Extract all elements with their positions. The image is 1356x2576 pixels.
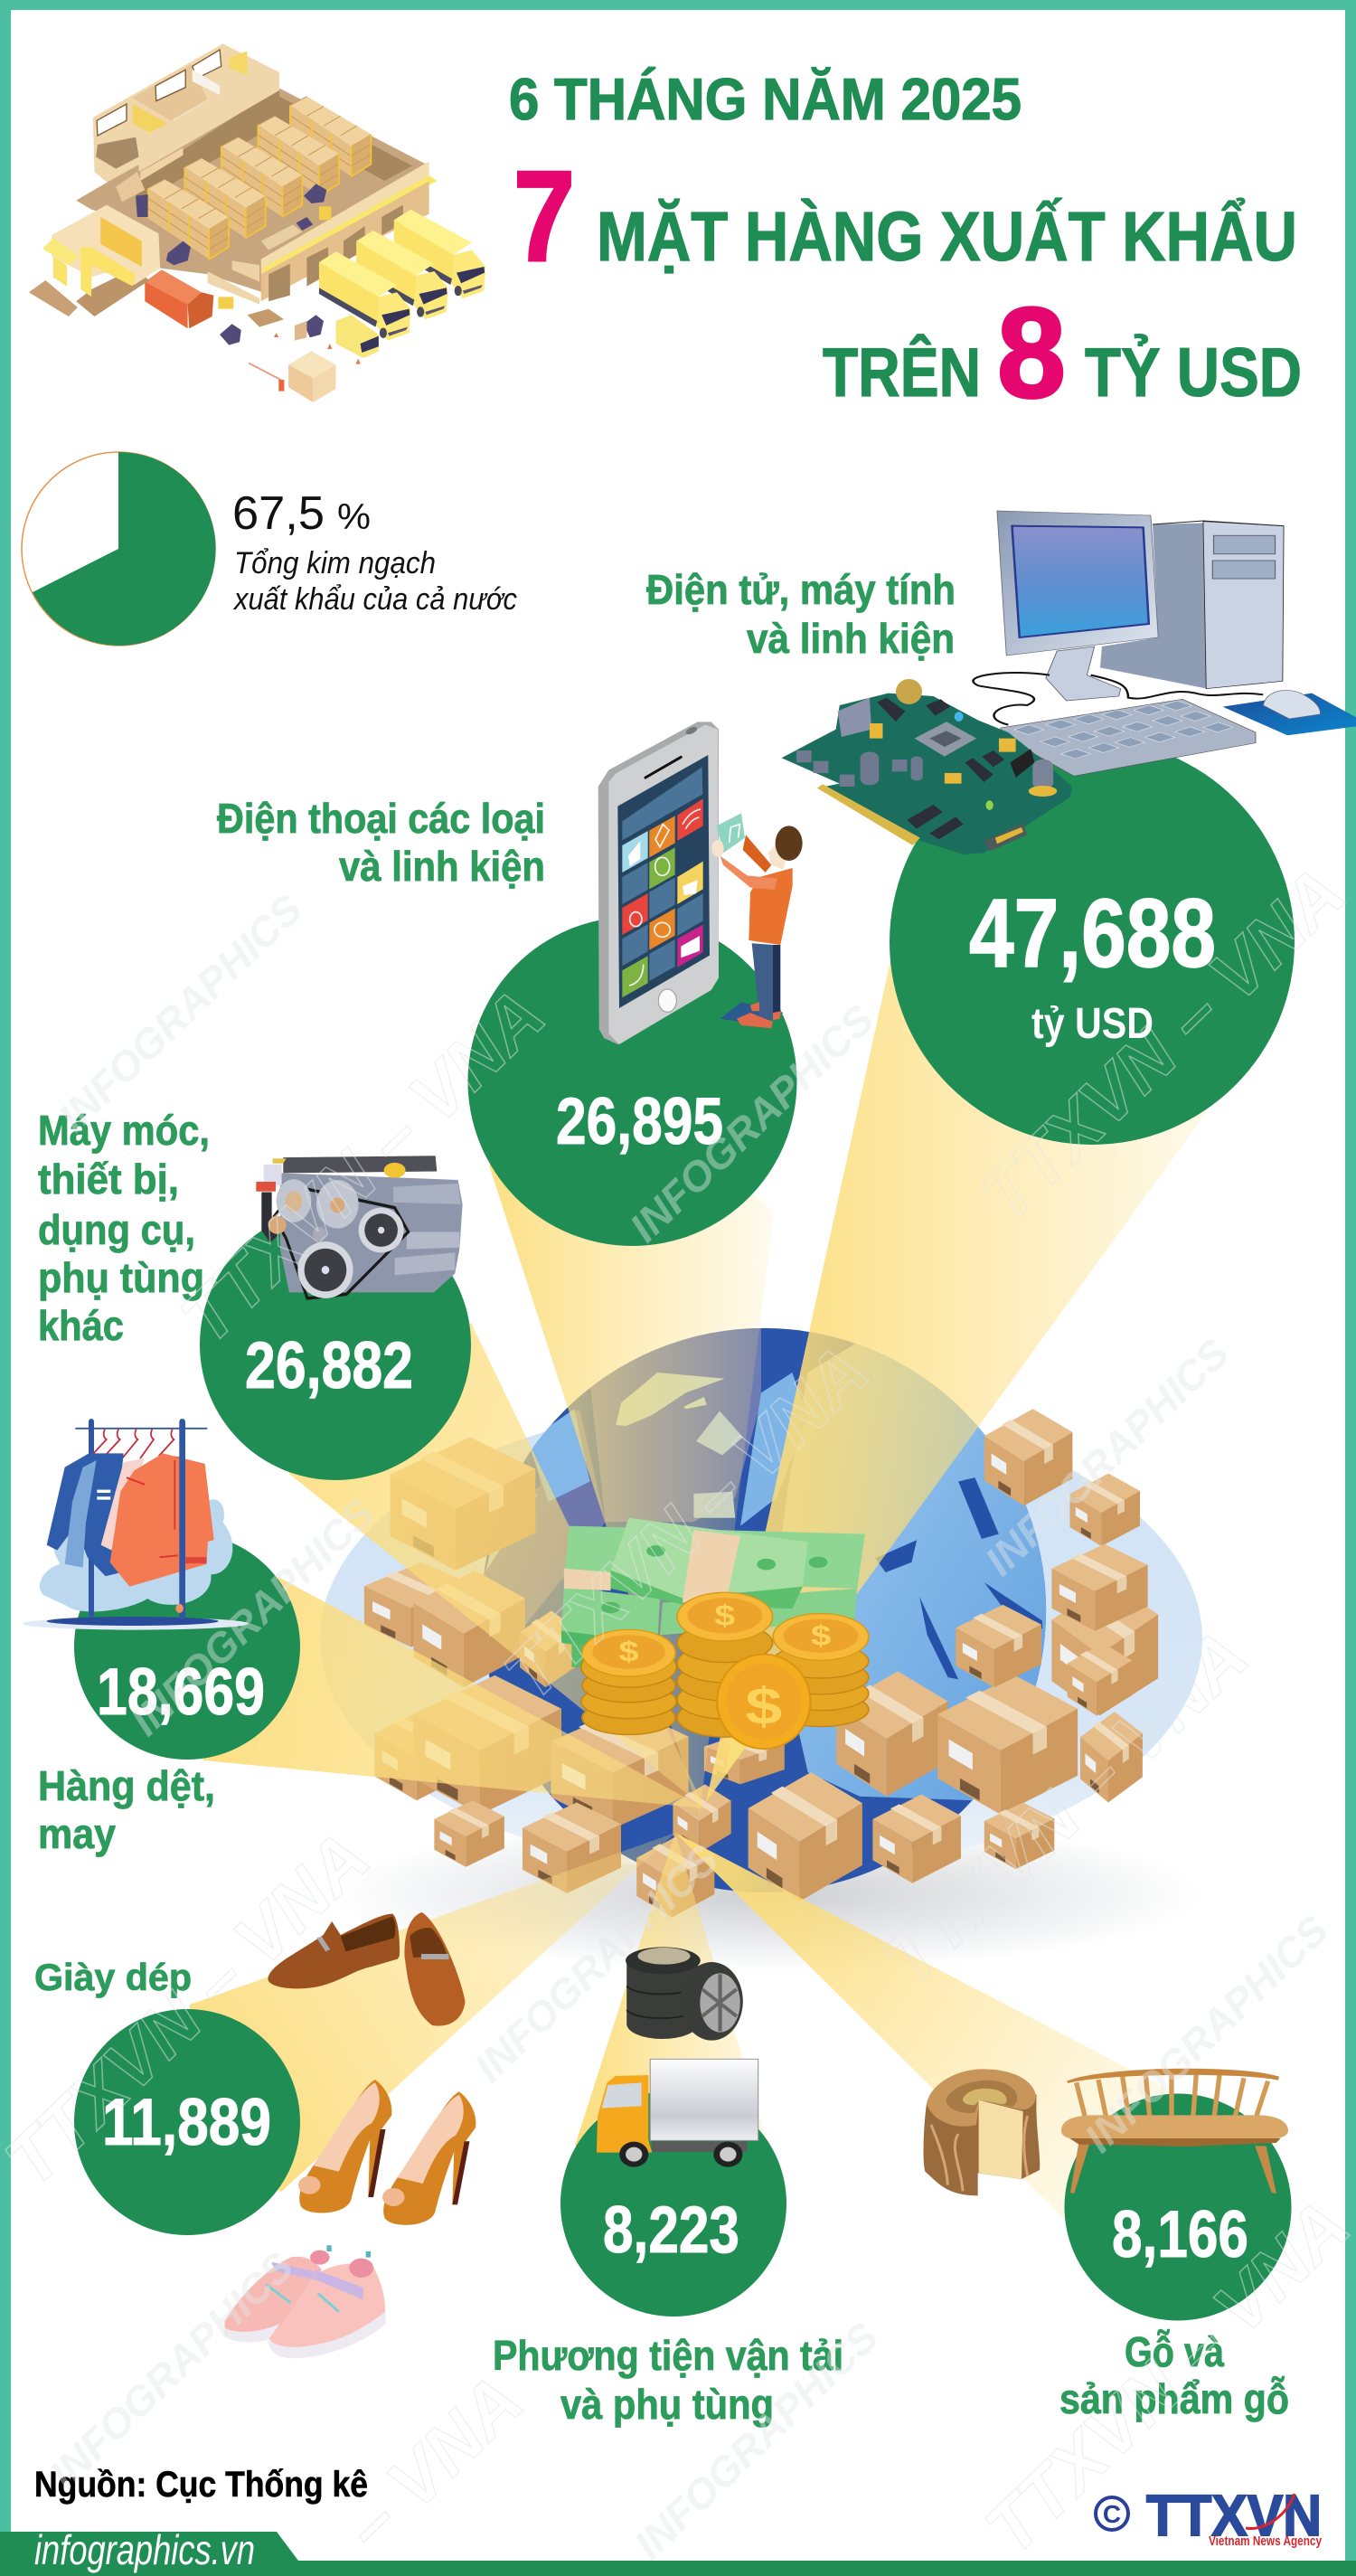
icon: tyres [626,1947,743,2041]
label: textiles [38,1762,215,1857]
watermarks: INFOGRAPHICS [625,2313,887,2568]
icon: sneakers [225,2245,385,2358]
label: vehicles: Phương tiện vận tải [493,2332,843,2379]
label: phones: Điện thoại các loại [217,795,545,842]
illustration: banknotes and gold coins: $ [811,1619,831,1651]
circle: 8,223: 8,223 [603,2194,739,2267]
watermarks: INFOGRAPHICS [1075,1906,1337,2161]
illustration: globe with halo [320,1328,1202,1971]
label: textiles: Hàng dệt, [38,1762,215,1809]
watermarks: INFOGRAPHICS [620,995,882,1250]
circle: 18,669: 18,669 [97,1656,265,1729]
circle: 26,882 [200,1209,471,1480]
circle: 47,688: 47,688 [969,878,1216,987]
pie caption: 67,5 [232,487,325,540]
watermarks: INFOGRAPHICS [465,1835,727,2090]
title line 1: 6 THÁNG NĂM 2025 [509,66,1022,132]
illustration: cardboard boxes around globe [364,1409,1158,1918]
label: phones [217,795,545,890]
label: machinery: Máy móc, [38,1107,210,1154]
circle: 8,166 [1065,2094,1291,2320]
watermarks: INFOGRAPHICS [975,1329,1238,1584]
label: phones: và linh kiện [339,843,545,890]
label: wood: sản phẩm gỗ [1059,2375,1289,2422]
label: machinery: dụng cụ, [38,1206,195,1253]
circle: 47,688: tỷ USD [1031,1000,1154,1048]
light beams from globe to circles [185,940,1266,2219]
circle: 26,882: 26,882 [245,1329,413,1402]
icon: wooden bench [1061,2069,1288,2194]
watermarks: – VNA [328,2360,538,2566]
label: wood [1059,2328,1289,2422]
footer bar with website [0,2526,1356,2576]
icon: men's loafers [268,1912,465,2026]
watermarks: TTXVN – VNA [970,2184,1356,2570]
label: electronics [646,566,956,662]
title number 8: 8 [997,281,1066,425]
title line 3 start: TRÊN [823,334,981,411]
title [509,66,1302,425]
icon: delivery truck [597,2059,758,2167]
logo: TTXVN: C [1103,2500,1121,2528]
illustration: banknotes and gold coins: $ [745,1676,782,1735]
logo: TTXVN: Vietnam News Agency [1209,2534,1323,2549]
circle: 8,166: 8,166 [1112,2198,1248,2271]
watermarks: TTXVN – VNA [489,1330,883,1715]
label: electronics: và linh kiện [747,615,955,662]
label: footwear: Giày dép [34,1956,192,1998]
illustration: banknotes and gold coins: $ [714,1599,736,1631]
label: wood: Gỗ và [1125,2328,1224,2375]
pie caption: % [337,497,371,537]
title line 3 end: TỶ USD [1085,335,1302,411]
illustration: banknotes and gold coins [561,1518,869,1776]
pie caption [232,487,517,617]
watermarks: TTXVN – VNA [869,1615,1263,2000]
label: machinery: thiết bị, [38,1156,179,1203]
label: textiles: may [38,1810,116,1857]
watermarks: TTXVN – VNA [0,1816,384,2202]
circle: 8,223 [560,2090,786,2317]
pie caption: Tổng kim ngạch [234,546,436,580]
label: vehicles [493,2332,843,2428]
label: machinery: phụ tùng [38,1254,204,1301]
logo: TTXVN: TTXVN [1146,2483,1322,2548]
label: vehicles: và phụ tùng [560,2381,774,2428]
pie chart 67,5% [22,452,216,646]
label: electronics: Điện tử, máy tính [646,566,956,613]
icon: circuit board [782,679,1072,854]
watermarks: TTXVN – VNA [165,974,560,1359]
circle: 11,889 [74,2009,300,2235]
source note: Nguồn: Cục Thống kê [34,2465,368,2505]
illustration: banknotes and gold coins: $ [618,1636,639,1667]
icon: tree stump [924,2069,1040,2195]
circle: 18,669 [74,1533,300,1760]
circle: 11,889: 11,889 [102,2086,271,2159]
icon: engine [256,1156,463,1298]
circle: 26,895 [468,917,797,1246]
pie caption: xuất khẩu của cả nước [232,582,517,617]
illustration: warehouse [29,43,485,402]
watermarks: INFOGRAPHICS [49,885,311,1140]
footer bar with website: infographics.vn [34,2526,255,2573]
watermarks: INFOGRAPHICS [121,1489,383,1744]
label: machinery [38,1107,210,1349]
label: machinery: khác [38,1302,124,1349]
icon: smartphone with person [598,722,803,1044]
watermarks: INFOGRAPHICS [40,2242,302,2497]
icon: desktop computer [973,511,1356,776]
title number 7: 7 [513,145,575,288]
watermarks: TTXVN – VNA [965,852,1356,1237]
icon: high heels [298,2080,476,2225]
icon: clothes rack [23,1419,249,1630]
circle: 47,688 [890,740,1295,1145]
circle: 26,895: 26,895 [556,1085,723,1158]
watermarks [0,852,1356,2570]
